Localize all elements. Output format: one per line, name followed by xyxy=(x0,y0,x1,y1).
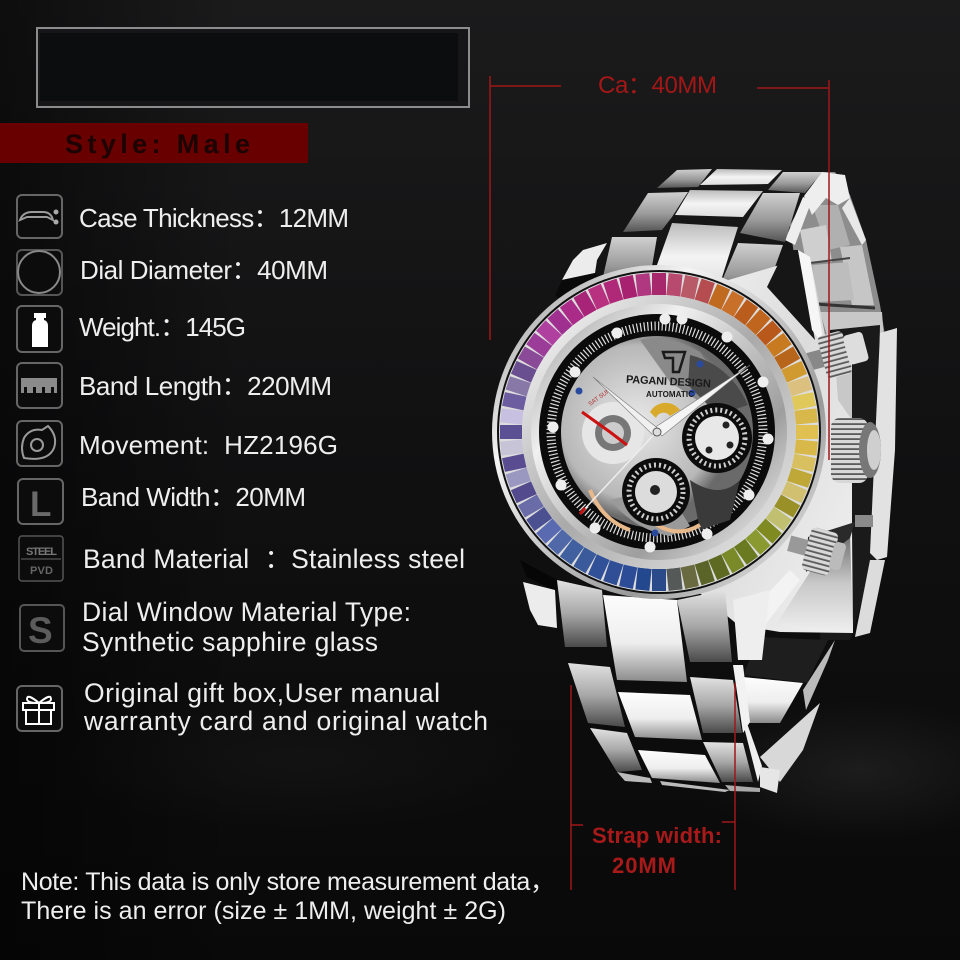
date subdial xyxy=(682,403,752,473)
note xyxy=(21,868,555,925)
window material row: Synthetic sapphire glass xyxy=(82,627,378,657)
band length row xyxy=(17,363,332,408)
hands xyxy=(580,365,750,514)
case thickness row: Case Thickness：12MM xyxy=(79,203,349,233)
weight row: Weight.：145G xyxy=(79,312,246,342)
lower bracelet xyxy=(557,580,835,793)
skeleton dial xyxy=(561,336,753,536)
band width row: L xyxy=(30,485,51,524)
case width dimension: Ca：40MM xyxy=(598,72,717,99)
window material row: Dial Window Material Type: xyxy=(82,597,411,627)
movement row xyxy=(17,421,338,466)
style banner: Style: Male xyxy=(65,129,250,159)
clasp side xyxy=(820,325,897,640)
hours subdial xyxy=(622,458,690,526)
package contents row xyxy=(17,678,488,736)
inner polished ring xyxy=(522,295,796,569)
package contents row: warranty card and original watch xyxy=(83,706,488,736)
strap width dimension xyxy=(571,683,735,890)
day subdial xyxy=(582,388,644,464)
package contents row: Original gift box,User manual xyxy=(84,678,440,708)
day subdial: SAT SUN xyxy=(588,388,612,408)
logo: PAGANI DESIGN xyxy=(626,374,711,390)
bezel outer polished ring xyxy=(492,265,826,599)
strap width dimension: 20MM xyxy=(612,853,676,878)
logo: AUTOMATIC xyxy=(646,390,694,399)
window material row: S xyxy=(28,610,53,651)
movement row: Movement: HZ2196G xyxy=(79,430,338,460)
upper bracelet xyxy=(600,169,885,350)
case width dimension xyxy=(490,72,829,460)
note: Note: This data is only store measurement data， xyxy=(21,868,555,896)
case body xyxy=(520,243,855,633)
crown and pushers xyxy=(783,325,881,579)
window material row xyxy=(20,597,411,657)
rainbow baguette gems xyxy=(500,273,818,591)
band material row: PVD xyxy=(30,565,53,577)
band material row: STEEL xyxy=(26,546,57,558)
dial diameter row xyxy=(17,250,328,295)
black tachymeter ring xyxy=(539,314,775,552)
title placeholder box xyxy=(37,28,469,107)
band length row: Band Length：220MM xyxy=(79,371,332,401)
dial diameter row: Dial Diameter：40MM xyxy=(80,255,328,285)
weight row xyxy=(17,306,246,352)
note: There is an error (size ± 1MM, weight ± 2G) xyxy=(21,897,506,925)
strap width dimension: Strap width: xyxy=(592,823,722,848)
watch xyxy=(492,169,897,793)
style banner xyxy=(0,123,308,163)
band material row: Band Material ：Stainless steel xyxy=(83,544,465,574)
band material row xyxy=(19,536,465,581)
band width row xyxy=(18,479,306,524)
band width row: Band Width：20MM xyxy=(81,482,306,512)
logo xyxy=(626,352,711,399)
case thickness row xyxy=(17,195,349,238)
